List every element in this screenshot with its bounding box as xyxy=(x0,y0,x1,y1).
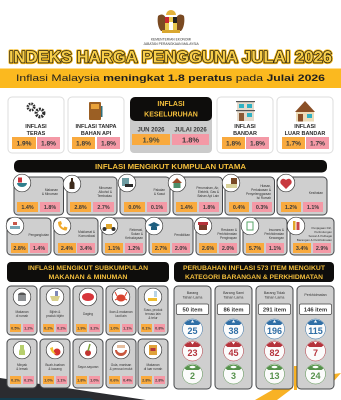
card: insurans: Kewangan xyxy=(269,236,284,240)
card: bijirin xyxy=(40,286,70,335)
column: perkhidmatan: 115 xyxy=(308,326,323,336)
column: barang tidak tahan lama xyxy=(256,286,293,389)
panel: inflasi bandar xyxy=(217,97,273,153)
column: barang tidak tahan lama: 291 item xyxy=(263,308,286,314)
card: rekreasi xyxy=(100,217,146,255)
card: pendidikan: 2.0% xyxy=(175,246,187,252)
card: kesihatan xyxy=(277,174,327,215)
card: perumahan: 1.8% xyxy=(203,205,215,211)
icon: fuel pump xyxy=(89,102,102,120)
card: kesihatan: 1.2% xyxy=(285,205,297,211)
months: JUN 2026 xyxy=(137,128,165,134)
card: ikan: Ikan & makanan xyxy=(109,310,133,314)
label: TERAS xyxy=(27,131,46,137)
card: insurans: 1.1% xyxy=(269,246,281,252)
card: makanan di luar rumah: Makanan xyxy=(146,363,160,367)
card: bijirin: 0.2% xyxy=(44,326,53,330)
values: 1.9% xyxy=(142,136,160,144)
card: penjagaan diri: 3.4% xyxy=(296,246,308,252)
card: penjagaan diri xyxy=(287,217,334,255)
card: minyak xyxy=(7,339,37,388)
column: barang separa tahan lama: Barang Sami xyxy=(223,291,244,295)
label: INFLASI xyxy=(25,124,47,130)
card: pengangkutan: 2.8% xyxy=(13,246,26,252)
card: minyak: 0.2% xyxy=(11,378,20,382)
column: barang separa tahan lama: 3 xyxy=(231,371,236,381)
values: 1.8% xyxy=(41,140,56,148)
card: minuman alkohol: 2.7% xyxy=(97,205,110,211)
column: perkhidmatan: 24 xyxy=(310,371,321,381)
card: restoran: Restoran & xyxy=(221,228,238,232)
card: rekreasi: Sukan & xyxy=(131,232,144,236)
card: bijirin: produk bijirin xyxy=(46,314,64,318)
title: INDEKS HARGA PENGGUNA JULAI 2026 xyxy=(9,48,332,66)
column: barang tahan lama: 50 item xyxy=(183,308,202,314)
values xyxy=(12,137,60,149)
card: pakaian & kasut xyxy=(118,174,170,215)
card: kesihatan: 1.1% xyxy=(307,205,319,211)
card: pengangkutan: Pengangkutan xyxy=(28,233,49,237)
label: INFLASI xyxy=(294,124,316,130)
values xyxy=(282,137,329,149)
card: hiasan xyxy=(222,174,274,215)
card: daging: 1.9% xyxy=(77,326,86,330)
panel: inflasi luar bandar xyxy=(277,97,333,153)
panel: inflasi tanpa bahan api xyxy=(68,97,124,153)
card: makanan di luar rumah: di luar rumah xyxy=(144,367,163,371)
ministry name: KEMENTERIAN EKONOMI xyxy=(151,38,191,42)
card: sayur-sayuran: 1.0% xyxy=(90,378,99,382)
card: hiasan: 0.3% xyxy=(256,205,268,211)
card: pendidikan: 2.7% xyxy=(155,246,167,252)
card: buah-buahan: 1.1% xyxy=(57,378,66,382)
card: ikan: 1.0% xyxy=(110,326,119,330)
card: makanan di luar rumah: 2.8% xyxy=(155,378,164,382)
card: pakaian & kasut: Pakaian xyxy=(153,188,165,192)
card: susu: Susu, produk xyxy=(144,308,163,312)
card: sayur-sayuran: Sayur-sayuran xyxy=(78,365,99,369)
card: penjagaan diri: Barangan & Perkhidmatan xyxy=(297,238,332,242)
card: buah-buahan xyxy=(40,339,70,388)
card: gula: 0.6% xyxy=(110,378,119,382)
card: susu: tenusu lain xyxy=(145,312,161,316)
card: makanan & minuman: 1.4% xyxy=(21,205,34,211)
column: perkhidmatan: 7 xyxy=(313,348,318,358)
heading: perubahan inflasi: PERUBAHAN INFLASI 573 ITEM MENGIKUT xyxy=(183,265,325,272)
values: 1.8% xyxy=(226,140,241,148)
card: penjagaan diri: Perlindungan xyxy=(314,230,332,234)
decorative bottom left wedge xyxy=(0,378,146,400)
months: JULAI 2026 xyxy=(174,128,207,134)
column: perkhidmatan: 146 item xyxy=(304,308,327,314)
card: hiasan: Penyelenggaraan xyxy=(246,192,271,196)
yellow accent xyxy=(255,366,341,400)
label: INFLASI xyxy=(234,124,256,130)
card: insurans: Perkhidmatan xyxy=(264,232,284,236)
card: makanan di rumah: Makanan xyxy=(15,310,29,314)
card: insurans xyxy=(241,217,287,255)
card: hiasan: Perkakasan & xyxy=(251,188,272,192)
values: 1.8% xyxy=(101,140,116,148)
values: 1.8% xyxy=(76,140,91,148)
card: rekreasi: 1.1% xyxy=(108,246,120,252)
card: maklumat & komunikasi xyxy=(53,217,98,255)
card: restoran: 2.0% xyxy=(222,246,234,252)
values: 1.8% xyxy=(250,140,265,148)
column: barang tahan lama: 25 xyxy=(187,326,198,336)
heading: perubahan inflasi: KATEGORI BARANGAN & PERKHIDMATAN xyxy=(185,274,323,281)
card: perumahan: Elektrik, Gas & xyxy=(198,190,220,194)
heading: kumpulan utama xyxy=(14,160,327,172)
card: restoran xyxy=(194,217,240,255)
column: barang separa tahan lama: 86 item xyxy=(224,308,243,314)
card: daging: 3.2% xyxy=(90,326,99,330)
icon: building xyxy=(236,101,255,121)
card: kesihatan: Kesihatan xyxy=(309,191,323,195)
column: perkhidmatan xyxy=(297,286,334,389)
panel: inflasi teras xyxy=(8,97,64,153)
card: restoran: 2.6% xyxy=(202,246,214,252)
card: sayur-sayuran: 1.8% xyxy=(77,378,86,382)
card: pakaian & kasut: 0.0% xyxy=(128,205,141,211)
column: barang tahan lama: Barang xyxy=(187,291,198,295)
card: gula: 0.4% xyxy=(123,378,132,382)
card: minuman alkohol: Minuman xyxy=(99,186,112,190)
label: INFLASI TANPA xyxy=(75,124,117,130)
heading: INFLASI xyxy=(157,101,185,108)
card: susu xyxy=(138,286,168,335)
card: makanan di rumah: di rumah xyxy=(16,314,28,318)
column: barang tidak tahan lama: Barang Tidak xyxy=(264,291,285,295)
heading: perubahan inflasi xyxy=(174,262,334,282)
card: makanan & minuman xyxy=(13,174,63,215)
card: minuman alkohol xyxy=(63,175,117,215)
column: barang separa tahan lama: 38 xyxy=(228,326,239,336)
card: restoran: Penginapan xyxy=(220,236,237,240)
card: susu: 0.8% xyxy=(155,326,164,330)
values: 1.8% xyxy=(182,136,199,144)
panel: inflasi keseluruhan xyxy=(130,97,212,153)
card: makanan & minuman: Makanan xyxy=(45,188,58,192)
card: insurans: 5.7% xyxy=(249,246,261,252)
card: minyak: Minyak xyxy=(17,363,27,367)
card: perumahan xyxy=(168,174,222,215)
card: makanan di luar rumah xyxy=(138,339,168,388)
values: 1.7% xyxy=(286,140,301,148)
column: perkhidmatan: Perkhidmatan xyxy=(304,293,327,297)
values: 1.9% xyxy=(16,140,32,148)
values: 1.7% xyxy=(310,140,325,148)
card: pengangkutan: 1.4% xyxy=(33,246,45,252)
ministry name: JABATAN PERANGKAAN MALAYSIA xyxy=(143,42,199,46)
card: rekreasi: Rekreasi, xyxy=(130,228,143,232)
card: perumahan: Perumahan, Air, xyxy=(196,186,219,190)
card: makanan di luar rumah: 2.8% xyxy=(142,378,151,382)
card: restoran: Perkhidmatan xyxy=(217,232,237,236)
card: insurans: Insurans & xyxy=(269,228,285,232)
card: pendidikan: Pendidikan xyxy=(174,233,190,237)
card: sayur-sayuran xyxy=(73,339,103,388)
card: rekreasi: Kebudayaan xyxy=(125,236,143,240)
card: rekreasi: 1.2% xyxy=(128,246,140,252)
card: maklumat & komunikasi: 3.4% xyxy=(80,246,92,252)
card: susu: 0.1% xyxy=(142,326,151,330)
label: LUAR BANDAR xyxy=(285,131,325,137)
card: daging: Daging xyxy=(83,312,93,316)
card: buah-buahan: 1.0% xyxy=(44,378,53,382)
card: penjagaan diri: Penjagaan Diri, xyxy=(311,226,332,230)
icon: house xyxy=(295,101,315,122)
heading: kumpulan utama: INFLASI MENGIKUT KUMPULAN UTAMA xyxy=(95,162,247,171)
card: maklumat & komunikasi: Komunikasi xyxy=(79,234,95,238)
column: barang tahan lama: 2 xyxy=(190,371,195,381)
card: pakaian & kasut: & Kasut xyxy=(154,192,165,196)
card: minyak: & lemak xyxy=(16,367,28,371)
card: hiasan: Hiasan, xyxy=(260,184,271,188)
values xyxy=(72,137,120,149)
column: barang separa tahan lama: Tahan Lama xyxy=(224,296,243,300)
column: barang tahan lama: 23 xyxy=(187,348,198,358)
column: barang tidak tahan lama: 196 xyxy=(267,326,282,336)
card: pakaian & kasut: 0.1% xyxy=(151,205,163,211)
card: minuman alkohol: Tembakau xyxy=(97,194,112,198)
subtitle band xyxy=(0,68,341,88)
column: barang separa tahan lama xyxy=(215,286,252,389)
card: buah-buahan: Buah-buahan xyxy=(45,363,65,367)
card: bijirin: Bijirin & xyxy=(50,310,61,314)
months xyxy=(137,128,207,134)
column: barang tahan lama xyxy=(174,286,211,389)
card: makanan di rumah: 1.2% xyxy=(24,326,33,330)
heading: KESELURUHAN xyxy=(144,112,198,118)
heading: subkumpulan xyxy=(7,262,169,282)
values xyxy=(132,134,209,145)
card: minuman alkohol: 2.8% xyxy=(74,205,87,211)
card: maklumat & komunikasi: 2.4% xyxy=(61,246,73,252)
values xyxy=(222,137,269,149)
column: barang tidak tahan lama: Tahan Lama xyxy=(265,296,284,300)
card: penjagaan diri: 2.9% xyxy=(316,246,328,252)
column: barang tahan lama: Tahan Lama xyxy=(183,296,202,300)
card: buah-buahan: & kacang xyxy=(48,367,62,371)
card: pendidikan xyxy=(145,217,193,255)
card: maklumat & komunikasi: Maklumat & xyxy=(78,230,96,234)
column: barang tidak tahan lama: 13 xyxy=(269,371,280,381)
icon: gears xyxy=(28,104,44,117)
emblem: ministry crest xyxy=(158,10,184,33)
card: gula xyxy=(106,339,136,388)
card: minuman alkohol: Alkohol & xyxy=(99,190,113,194)
card: penjagaan diri: Sosial & Pelbagai xyxy=(308,234,332,238)
card: gula: Gula, manisan xyxy=(111,363,131,367)
column: barang separa tahan lama: 45 xyxy=(228,348,239,358)
card: makanan & minuman: 1.8% xyxy=(44,205,56,211)
card: hiasan: Isi Rumah xyxy=(257,196,271,200)
card: perumahan: Bahan Api Lain xyxy=(198,194,219,198)
column: barang tidak tahan lama: 82 xyxy=(269,348,280,358)
card: perumahan: 1.4% xyxy=(180,205,193,211)
title: INDEKS HARGA PENGGUNA JULAI 2026 xyxy=(9,48,332,66)
card: hiasan: 0.4% xyxy=(233,205,245,211)
card: pengangkutan xyxy=(6,217,51,255)
card: minyak: 0.2% xyxy=(24,378,33,382)
card: makanan di rumah xyxy=(7,286,37,335)
card: makanan di rumah: 0.5% xyxy=(11,326,20,330)
label: BANDAR xyxy=(233,131,257,137)
heading: subkumpulan: MAKANAN & MINUMAN xyxy=(48,274,128,281)
card: makanan & minuman: & Minuman xyxy=(42,192,58,196)
card: ikan: 1.1% xyxy=(123,326,132,330)
subtitle band: Inflasi Malaysia meningkat 1.8 peratus pada Julai 2026 xyxy=(16,72,325,83)
card: ikan: laut lain xyxy=(116,314,127,318)
card: bijirin: 0.2% xyxy=(57,326,66,330)
card: daging xyxy=(73,286,103,335)
card: susu: & telur xyxy=(148,316,159,320)
heading: subkumpulan: INFLASI MENGIKUT SUBKUMPULAN xyxy=(28,265,148,272)
ministry name xyxy=(143,38,199,46)
label: BAHAN API xyxy=(81,131,112,137)
card: ikan xyxy=(106,286,136,335)
card: gula: & pencuci mulut xyxy=(110,367,132,371)
